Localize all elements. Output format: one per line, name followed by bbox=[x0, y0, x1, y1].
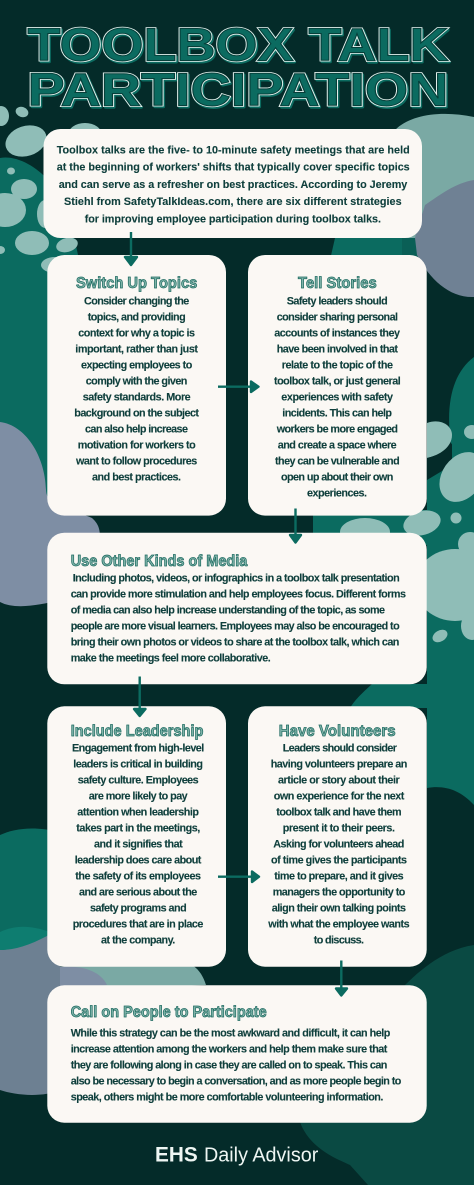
panel: have volunteers: present it to their peers. bbox=[283, 822, 395, 834]
arrow: include leadership to have volunteers bbox=[218, 872, 259, 882]
title: PARTICIPATION bbox=[29, 65, 450, 117]
panel: use other kinds of media: bring their own photos or videos to share at the toolbox talk, which can bbox=[71, 637, 399, 649]
panel: call on people to participate: speak, others might be more comfortable volunteering information. bbox=[71, 1092, 383, 1104]
panel: include leadership: leaders is critical in building bbox=[73, 758, 203, 770]
panel: use other kinds of media bbox=[47, 533, 427, 684]
heading: use other kinds of media: Use Other Kinds of Media bbox=[71, 553, 248, 570]
title: TOOLBOX TALK bbox=[28, 19, 448, 71]
panel: have volunteers: Leaders should consider bbox=[283, 742, 398, 754]
panel: call on people to participate: While this strategy can be the most awkward and difficult, it can help bbox=[71, 1028, 391, 1040]
panel: tell stories: and create a space where bbox=[278, 439, 397, 451]
panel: have volunteers: toolbox talk and have them bbox=[276, 806, 402, 818]
panel: call on people to participate: they are following along in case they are called on to speak. This can bbox=[71, 1060, 387, 1072]
panel: introduction bbox=[44, 129, 422, 238]
panel: switch up topics: background on the subject bbox=[74, 407, 199, 419]
panel: tell stories: workers be more engaged bbox=[276, 423, 398, 435]
panel: include leadership bbox=[47, 706, 226, 967]
panel: include leadership: safety programs and bbox=[90, 902, 187, 914]
panel: call on people to participate: also be necessary to begin a conversation, and as more people begin to bbox=[71, 1076, 402, 1088]
panel: have volunteers: time to prepare, and it gives bbox=[274, 870, 404, 882]
arrow: media to include leadership bbox=[134, 676, 146, 716]
panel: introduction: Toolbox talks are the five- to 10-minute safety meetings that are held bbox=[57, 144, 410, 156]
heading: have volunteers: Have Volunteers bbox=[279, 723, 396, 740]
panel: tell stories: toolbox talk, or just general bbox=[274, 375, 401, 387]
panel: switch up topics: comply with the given bbox=[86, 375, 187, 387]
panel: use other kinds of media: make the meetings feel more collaborative. bbox=[71, 653, 271, 665]
panel: use other kinds of media: can provide more stimulation and help employees focus. Different forms bbox=[71, 589, 406, 601]
heading: call on people to participate: Call on People to Participate bbox=[71, 1004, 267, 1021]
panel: have volunteers: of time gives the participants bbox=[271, 854, 407, 866]
panel: tell stories: experiences. bbox=[307, 487, 367, 499]
panel: tell stories: incidents. This can help bbox=[282, 407, 392, 419]
panel: have volunteers: managers the opportunity to bbox=[273, 886, 406, 898]
panel: switch up topics: can also help increase bbox=[85, 423, 188, 435]
panel: introduction: Stiehl from SafetyTalkIdeas.com, there are six different strategies bbox=[64, 196, 402, 208]
panel: include leadership: at the company. bbox=[101, 934, 175, 946]
heading: include leadership: Include Leadership bbox=[71, 723, 203, 740]
panel: tell stories bbox=[248, 255, 427, 516]
panel: switch up topics: context for why a topic is bbox=[78, 327, 195, 339]
title: TOOLBOX TALK bbox=[28, 19, 448, 71]
arrow: switch up topics to tell stories bbox=[218, 382, 258, 392]
panel: have volunteers: to discuss. bbox=[314, 934, 364, 946]
panel: include leadership: the safety of its employees bbox=[75, 870, 201, 882]
arrow: intro to switch up topics bbox=[125, 232, 137, 265]
panel: have volunteers: own experience for the next bbox=[274, 790, 405, 802]
arrow: tell stories to media bbox=[290, 508, 301, 542]
title: TOOLBOX TALK bbox=[29, 20, 450, 72]
panel: include leadership: safety culture. Employees bbox=[78, 774, 199, 786]
title bbox=[28, 19, 450, 117]
panel: include leadership: attention when leadership bbox=[77, 806, 199, 818]
panel: have volunteers bbox=[248, 706, 427, 967]
panel: tell stories: experiences with safety bbox=[281, 391, 393, 403]
arrow: have volunteers to call on people bbox=[336, 960, 347, 996]
panel: include leadership: are more likely to pay bbox=[89, 790, 188, 802]
footer logo: EHS bbox=[155, 1142, 198, 1166]
panel: introduction: and can serve as a refresher on best practices. According to Jeremy bbox=[59, 179, 407, 191]
panel: tell stories: they can be vulnerable and bbox=[275, 455, 400, 467]
panel: switch up topics: Consider changing the bbox=[84, 295, 189, 307]
footer logo bbox=[155, 1142, 319, 1166]
panel: tell stories: open up about their own bbox=[281, 471, 393, 483]
panel: have volunteers: article or story about their bbox=[278, 774, 400, 786]
panel: switch up topics: want to follow procedures bbox=[75, 455, 197, 467]
panel: introduction: for improving employee participation during toolbox talks. bbox=[85, 213, 381, 225]
panel: include leadership: takes part in the meetings, bbox=[76, 822, 200, 834]
panel: switch up topics: motivation for workers to bbox=[78, 439, 196, 451]
footer logo: Daily Advisor bbox=[204, 1144, 319, 1166]
panel: switch up topics bbox=[47, 255, 226, 516]
heading: tell stories: Tell Stories bbox=[298, 275, 377, 292]
panel: use other kinds of media: people are more visual learners. Employees may also be encouraged to bbox=[71, 621, 400, 633]
panel: tell stories: relate to the topic of the bbox=[282, 359, 393, 371]
panel: include leadership: and are serious about the bbox=[79, 886, 197, 898]
panel: tell stories: have been involved in that bbox=[277, 343, 398, 355]
panel: tell stories: consider sharing personal bbox=[277, 311, 398, 323]
title: PARTICIPATION bbox=[28, 64, 448, 116]
panel: include leadership: Engagement from high-level bbox=[72, 742, 204, 754]
panel: include leadership: leadership does care about bbox=[75, 854, 202, 866]
panel: switch up topics: expecting employees to bbox=[81, 359, 193, 371]
panel: use other kinds of media: of media can also help increase understanding of the topic, as some bbox=[71, 605, 385, 617]
panel: use other kinds of media: Including photos, videos, or infographics in a toolbox talk presentation bbox=[73, 573, 400, 585]
background blobs: left side bbox=[0, 105, 206, 1095]
heading: switch up topics: Switch Up Topics bbox=[76, 275, 197, 292]
panel: call on people to participate bbox=[47, 985, 427, 1123]
panel: include leadership: and it signifies that bbox=[94, 838, 183, 850]
background blobs: right side bbox=[300, 114, 474, 1185]
panel: switch up topics: safety standards. More bbox=[83, 391, 191, 403]
panel: have volunteers: Asking for volunteers ahead bbox=[273, 838, 404, 850]
panel: include leadership: procedures that are in place bbox=[73, 918, 203, 930]
panel: call on people to participate: increase attention among the workers and help them make sure that bbox=[71, 1044, 388, 1056]
panel: introduction: at the beginning of workers' shifts that typically cover specific topics bbox=[57, 162, 410, 174]
panel: tell stories: Safety leaders should bbox=[287, 295, 388, 307]
panel: have volunteers: with what the employee wants bbox=[267, 918, 410, 930]
panel: have volunteers: having volunteers prepare an bbox=[271, 758, 407, 770]
panel: have volunteers: align their own talking points bbox=[272, 902, 406, 914]
panel: switch up topics: and best practices. bbox=[92, 471, 181, 483]
title: PARTICIPATION bbox=[28, 64, 448, 116]
panel: switch up topics: topics, and providing bbox=[88, 311, 186, 323]
panel: tell stories: accounts of instances they bbox=[274, 327, 400, 339]
panel: switch up topics: important, rather than just bbox=[75, 343, 198, 355]
